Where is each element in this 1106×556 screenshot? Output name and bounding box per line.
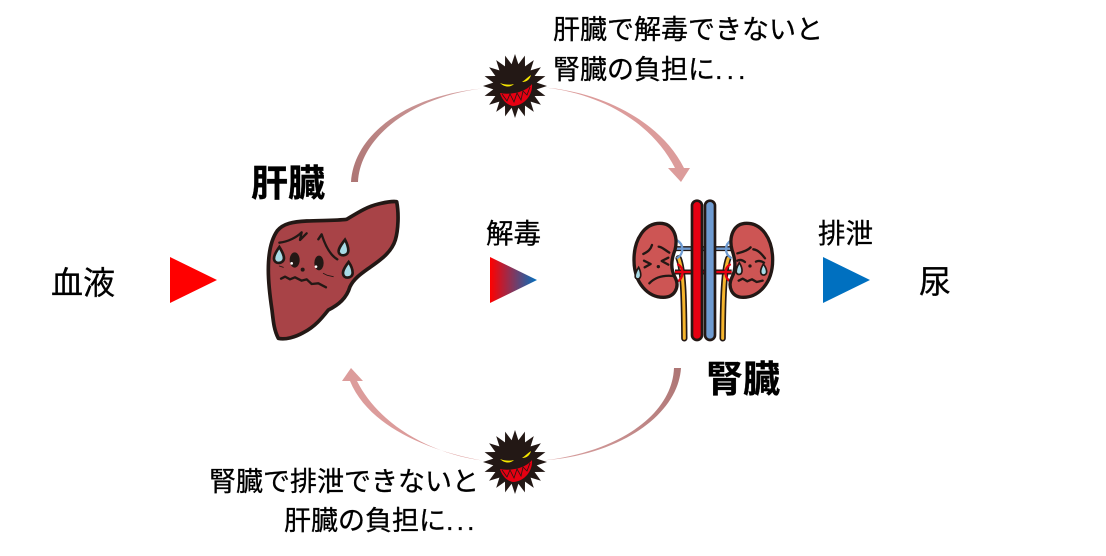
arrow: virus to liver [342, 368, 482, 460]
renal artery branches [675, 264, 732, 279]
left tear [635, 267, 641, 279]
vein [705, 201, 715, 340]
icon: bottom virus [483, 430, 547, 494]
label: excretion: 排泄 [818, 218, 873, 249]
arrow: red triangle [170, 257, 217, 303]
arrow: gradient triangle [490, 257, 537, 303]
liver sweat drops [274, 240, 353, 278]
liver brows [279, 232, 337, 287]
arrow: liver to virus [351, 88, 482, 182]
label: detox: 解毒 [486, 218, 541, 249]
text: top caption [553, 15, 823, 85]
artery [692, 201, 702, 340]
liver eyes [290, 252, 324, 272]
text: bottom caption: 肝臓の負担に... [284, 506, 478, 536]
right face [737, 247, 765, 282]
right kidney [730, 223, 773, 297]
text: bottom caption: 腎臓で排泄できないと [209, 467, 479, 497]
left kidney [634, 223, 677, 297]
renal vein branches [675, 241, 732, 256]
heading: kidney: 腎臓 [706, 359, 780, 400]
heading: liver: 肝臓 [251, 163, 325, 204]
text: bottom caption [209, 467, 479, 536]
icon: worried liver [268, 201, 398, 339]
text: urine: 尿 [919, 264, 951, 300]
arrow: kidney to virus [543, 368, 681, 460]
left face [643, 245, 673, 283]
arrow: blue triangle [823, 257, 870, 303]
icon: kidneys with vessels [634, 201, 773, 340]
text: top caption: 肝臓で解毒できないと [553, 15, 823, 45]
text: top caption: 腎臓の負担に... [553, 55, 750, 85]
text: blood: 血液 [51, 265, 115, 301]
icon: top virus [483, 54, 547, 118]
arrow: virus to kidney [545, 88, 690, 182]
right tears [736, 263, 767, 275]
ureters [679, 258, 728, 338]
